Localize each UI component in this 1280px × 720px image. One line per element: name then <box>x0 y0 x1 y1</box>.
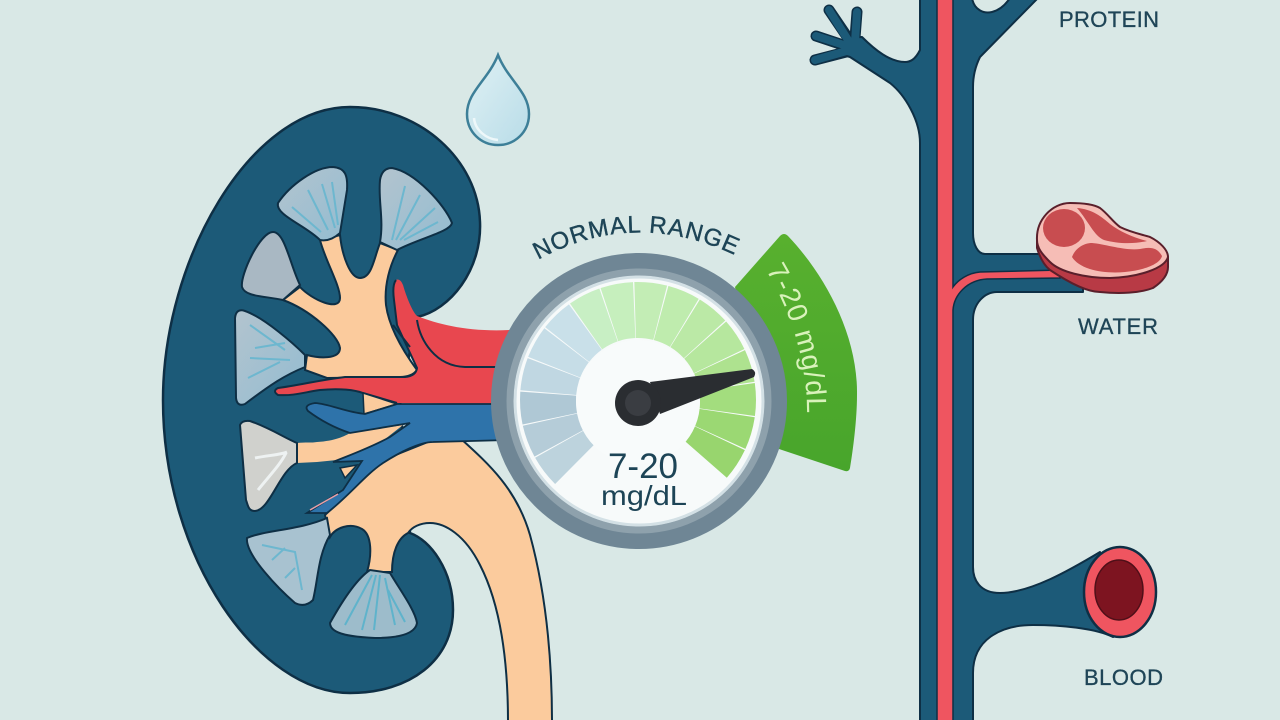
pyramid 2 <box>380 168 452 250</box>
label: blood: BLOOD <box>1084 665 1163 690</box>
steak top <box>1037 203 1168 278</box>
branch gap <box>972 0 1010 12</box>
label: protein: PROTEIN <box>1059 7 1159 32</box>
steak meat 3 <box>1072 243 1162 272</box>
pyramid 5 <box>240 421 297 511</box>
pyramid 4 <box>235 310 305 405</box>
kidney cortex <box>163 107 480 693</box>
pyramid 6 <box>247 518 330 605</box>
calyx neck <box>297 425 403 463</box>
icon: water drop <box>467 55 529 145</box>
peach slivers <box>340 393 397 478</box>
gauge needle <box>615 369 755 426</box>
gauge centre <box>576 340 700 464</box>
vein pink accent <box>310 494 338 510</box>
kidney illustration <box>163 107 552 720</box>
main vessel with branches <box>843 0 1113 720</box>
ureter <box>325 438 552 720</box>
gauge <box>503 265 775 537</box>
red central stripe <box>937 0 1060 720</box>
label: water: WATER <box>1078 314 1158 339</box>
normal range heading: NORMAL RANGE <box>532 216 740 260</box>
gauge value: 7-20 <box>608 447 678 486</box>
vessel tree <box>815 0 1156 720</box>
pyramid 1 <box>278 167 347 240</box>
gauge unit: mg/dL <box>601 480 687 511</box>
steak meat 2 <box>1077 208 1147 243</box>
gauge segments <box>511 273 765 527</box>
pyramid 7 <box>330 570 417 638</box>
green range tab <box>735 234 857 472</box>
vessel cross section <box>1084 547 1156 637</box>
renal vein <box>307 403 510 513</box>
gauge ring <box>503 265 775 537</box>
renal artery <box>275 280 510 404</box>
renal pelvis <box>283 235 417 378</box>
gauge ring inner band <box>510 272 768 530</box>
antler finger fills <box>815 10 857 60</box>
steak side <box>1037 230 1168 293</box>
icon: steak <box>1037 203 1168 293</box>
antler finger outlines <box>815 10 857 60</box>
tab label: 7-20 mg/dL <box>768 262 827 412</box>
gauge ring highlight <box>515 277 763 525</box>
pyramid 3 <box>242 232 300 300</box>
steak meat 1 <box>1043 209 1085 247</box>
